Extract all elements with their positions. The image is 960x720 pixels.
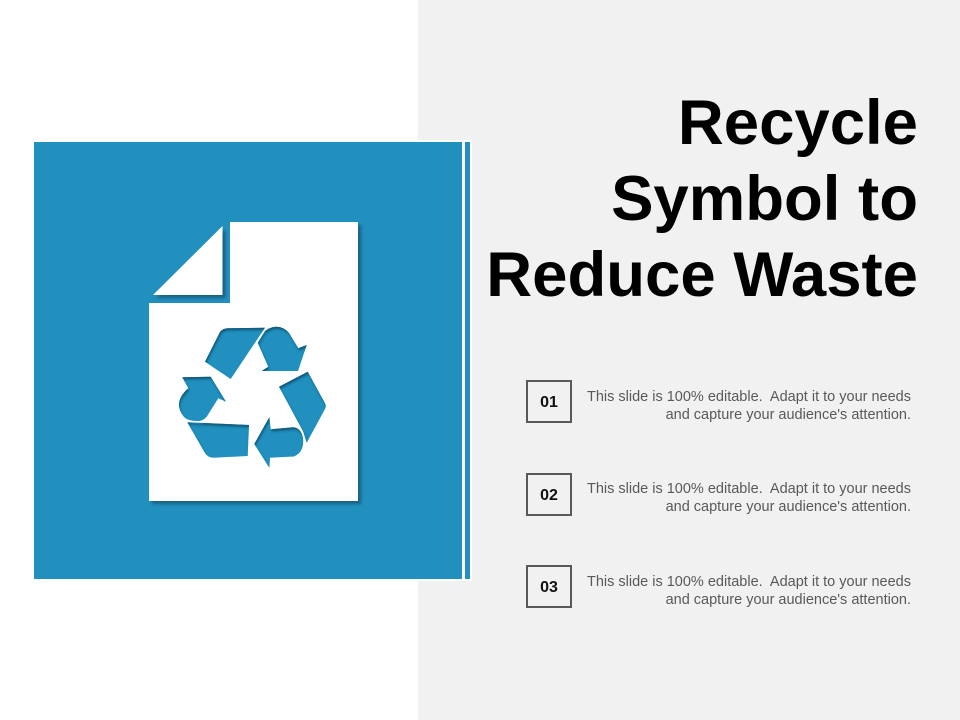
item 2 number box: 02 <box>540 487 558 504</box>
item 2 number box <box>526 473 572 516</box>
title: Symbol to <box>611 164 918 234</box>
item 1 number box <box>526 380 572 423</box>
right grey background panel <box>418 0 960 720</box>
item 1 text: This slide is 100% editable. Adapt it to your needs and capture your audience's attention. <box>587 389 911 423</box>
icon: document page <box>149 222 358 501</box>
title <box>486 88 918 310</box>
item 3 text: This slide is 100% editable. Adapt it to your needs and capture your audience's attention. <box>587 574 911 608</box>
item 3 number box: 03 <box>540 579 558 596</box>
item 3 number box <box>526 565 572 608</box>
panel: blue icon tile <box>34 140 472 581</box>
icon: folded corner <box>153 226 222 295</box>
item 1 number box: 01 <box>540 394 558 411</box>
item 2 text: This slide is 100% editable. Adapt it to your needs and capture your audience's attention. <box>587 481 911 515</box>
title: Recycle <box>678 88 918 158</box>
title: Reduce Waste <box>486 240 918 310</box>
icon: recycle symbol <box>179 327 326 468</box>
